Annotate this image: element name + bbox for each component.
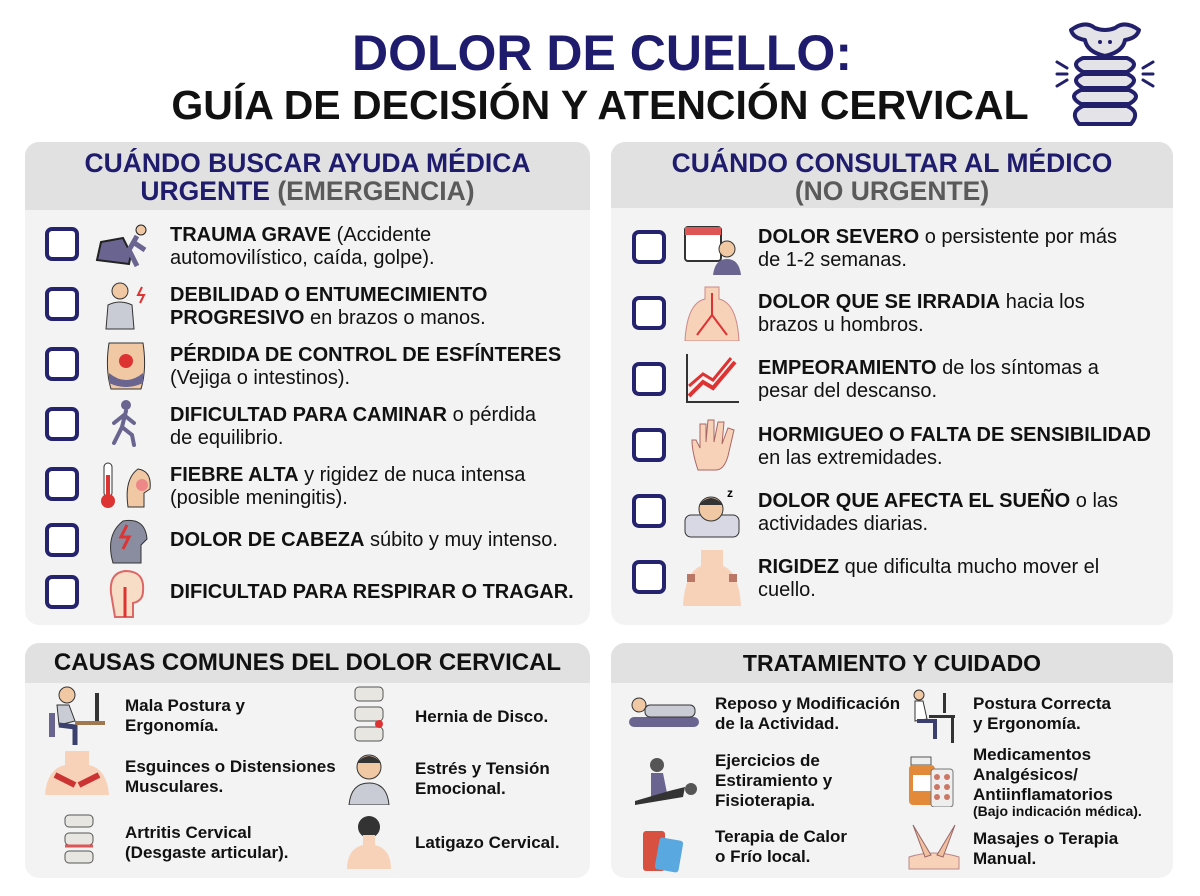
- treatment: exercises: Ejercicios de: [715, 751, 820, 770]
- treatment: rest: de la Actividad.: [715, 714, 839, 733]
- heading: treatment: [611, 643, 1173, 683]
- icon: spine: [1055, 22, 1155, 126]
- checklist: urgent: PROGRESIVO en brazos o manos.: [170, 307, 486, 329]
- treatment: massage: Masajes o Terapia: [973, 829, 1118, 848]
- icon: sleep: [684, 486, 740, 538]
- cause: whiplash: [347, 816, 560, 869]
- heading: urgent: CUÁNDO BUSCAR AYUDA MÉDICA: [84, 148, 531, 178]
- treatment: exercises: Fisioterapia.: [715, 791, 815, 810]
- icon: headache: [110, 520, 148, 564]
- checklist: non-urgent: RIGIDEZ que dificulta mucho mover el: [758, 556, 1099, 578]
- cause: stress: Emocional.: [415, 779, 506, 798]
- cause: hernia: Hernia de Disco.: [415, 707, 548, 726]
- checklist: non-urgent: en las extremidades.: [758, 447, 943, 469]
- panel: causes: [25, 643, 590, 878]
- heading: non-urgent: (NO URGENTE): [795, 176, 989, 206]
- checklist: non-urgent: DOLOR SEVERO o persistente por más: [758, 226, 1117, 248]
- checklist: non-urgent: cuello.: [758, 579, 816, 601]
- treatment: medication: (Bajo indicación médica).: [973, 803, 1142, 819]
- heading: non-urgent: CUÁNDO CONSULTAR AL MÉDICO: [672, 148, 1112, 178]
- checklist: urgent: DIFICULTAD PARA CAMINAR o pérdida: [170, 404, 536, 426]
- treatment: medication: Antiinflamatorios: [973, 785, 1113, 804]
- title: DOLOR DE CUELLO:: [352, 25, 852, 81]
- icon: fever: [101, 462, 151, 508]
- cause: arthritis: (Desgaste articular).: [125, 843, 288, 862]
- panel: urgent: [25, 142, 590, 625]
- treatment: rest: Reposo y Modificación: [715, 694, 900, 713]
- heading: causes: [25, 643, 590, 683]
- treatment: medication: Medicamentos: [973, 745, 1091, 764]
- checklist: non-urgent: [632, 226, 1151, 606]
- cause: sprain: Musculares.: [125, 777, 223, 796]
- cause: posture: [49, 686, 245, 745]
- treatment: massage: Manual.: [973, 849, 1036, 868]
- checklist: urgent: (Vejiga o intestinos).: [170, 367, 350, 389]
- treatment: rest: [629, 694, 900, 733]
- cause: sprain: Esguinces o Distensiones: [125, 757, 336, 776]
- cause: arthritis: [64, 814, 288, 864]
- treatment: correct posture: y Ergonomía.: [973, 714, 1081, 733]
- checklist: non-urgent: brazos u hombros.: [758, 314, 924, 336]
- checklist: urgent: PÉRDIDA DE CONTROL DE ESFÍNTERES: [170, 344, 561, 366]
- treatment: exercises: [635, 751, 832, 810]
- panel: treatment: [611, 643, 1173, 878]
- cause: posture: Mala Postura y: [125, 696, 245, 715]
- icon: chart worsening: [686, 354, 739, 403]
- heading: urgent: [25, 142, 590, 210]
- checklist: urgent: automovilístico, caída, golpe).: [170, 247, 435, 269]
- cause: arthritis: Artritis Cervical: [125, 823, 252, 842]
- cause: sprain: [45, 751, 336, 796]
- icon: car accident: [96, 224, 146, 268]
- cause: stress: [348, 754, 550, 805]
- checklist: non-urgent: HORMIGUEO O FALTA DE SENSIBILIDAD: [758, 424, 1151, 446]
- icon: weakness: [105, 282, 146, 330]
- icon: abdomen: [106, 342, 146, 390]
- treatment: heat cold: [643, 827, 847, 872]
- treatment: medication: [909, 745, 1142, 819]
- treatment: massage: [908, 824, 1118, 870]
- treatment: exercises: Estiramiento y: [715, 771, 832, 790]
- icon: throat: [110, 570, 144, 618]
- treatment: heat cold: Terapia de Calor: [715, 827, 847, 846]
- heading: urgent: URGENTE (EMERGENCIA): [140, 176, 475, 206]
- icon: radiating pain: [684, 286, 740, 341]
- title: [171, 25, 1029, 128]
- checklist: urgent: DOLOR DE CABEZA súbito y muy intenso.: [170, 529, 558, 551]
- checklist: non-urgent: EMPEORAMIENTO de los síntomas a: [758, 357, 1099, 379]
- checklist: non-urgent: pesar del descanso.: [758, 380, 937, 402]
- checklist: urgent: de equilibrio.: [170, 427, 283, 449]
- cause: posture: Ergonomía.: [125, 716, 219, 735]
- checklist: non-urgent: actividades diarias.: [758, 513, 928, 535]
- checklist: non-urgent: DOLOR QUE AFECTA EL SUEÑO o las: [758, 490, 1118, 512]
- checklist: urgent: [45, 224, 574, 618]
- cause: whiplash: Latigazo Cervical.: [415, 833, 560, 852]
- checklist: urgent: DEBILIDAD O ENTUMECIMIENTO: [170, 284, 487, 306]
- treatment: medication: Analgésicos/: [973, 765, 1078, 784]
- icon: calendar: [684, 226, 741, 275]
- icon: hand: [692, 420, 735, 470]
- treatment: heat cold: o Frío local.: [715, 847, 810, 866]
- heading: non-urgent: [611, 142, 1173, 208]
- icon: stiff neck: [683, 550, 741, 606]
- icon: walking: [112, 400, 136, 447]
- heading: causes: CAUSAS COMUNES DEL DOLOR CERVICAL: [54, 649, 561, 676]
- checklist: urgent: FIEBRE ALTA y rigidez de nuca intensa: [170, 464, 525, 486]
- cause: hernia: [354, 686, 548, 742]
- checklist: urgent: TRAUMA GRAVE (Accidente: [170, 224, 431, 246]
- checklist: urgent: DIFICULTAD PARA RESPIRAR O TRAGAR.: [170, 581, 574, 603]
- panel: non-urgent: [611, 142, 1173, 625]
- cause: stress: Estrés y Tensión: [415, 759, 550, 778]
- treatment: correct posture: Postura Correcta: [973, 694, 1111, 713]
- heading: treatment: TRATAMIENTO Y CUIDADO: [743, 650, 1041, 676]
- treatment: correct posture: [914, 690, 1112, 743]
- icon: sleep: z: [727, 486, 733, 500]
- title: GUÍA DE DECISIÓN Y ATENCIÓN CERVICAL: [171, 82, 1029, 128]
- checklist: non-urgent: de 1-2 semanas.: [758, 249, 907, 271]
- checklist: non-urgent: DOLOR QUE SE IRRADIA hacia los: [758, 291, 1085, 313]
- checklist: urgent: (posible meningitis).: [170, 487, 348, 509]
